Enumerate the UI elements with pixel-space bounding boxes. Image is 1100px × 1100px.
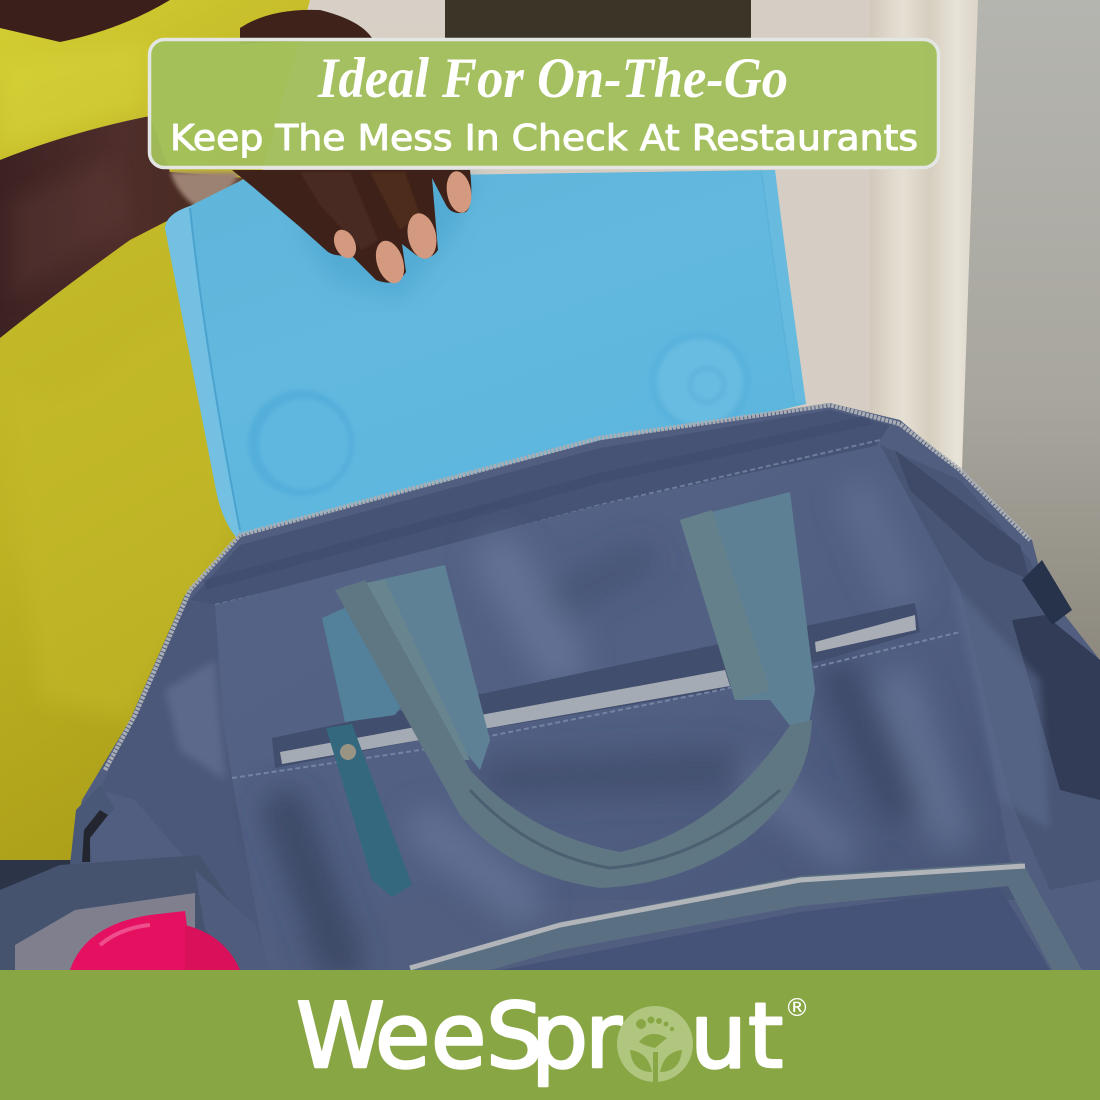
diamond stitched tab (322, 590, 420, 722)
footer band (0, 970, 1100, 1100)
side gusset left (100, 600, 265, 965)
hand and fingers holding mat (232, 169, 474, 287)
logo wordmark right: ut (690, 984, 783, 1089)
WeeSprout logo (296, 984, 810, 1089)
fingernails (330, 169, 474, 287)
banner subtitle: Keep The Mess In Check At Restaurants (170, 118, 918, 159)
bag body (70, 403, 1100, 970)
fabric carry handle (335, 492, 815, 888)
inner zipper pocket (232, 603, 960, 778)
yellow sweater (0, 0, 310, 910)
arm and wrist (0, 116, 245, 338)
neck and shoulder skin (0, 0, 170, 42)
upper fingers behind banner (240, 10, 372, 44)
pink cup (70, 911, 240, 970)
logo wordmark left: WeeSpr (296, 984, 622, 1089)
inner panel (215, 445, 1040, 940)
banner panel (150, 40, 938, 168)
main zipper along bag opening (105, 405, 1030, 770)
leather zipper pull (326, 724, 412, 897)
suction cup left (248, 390, 354, 496)
side gusset right (880, 445, 1100, 890)
suction cup right (649, 331, 751, 433)
bag rim lining (190, 410, 890, 605)
registered mark: ® (784, 993, 810, 1022)
fabric shadows and highlights (285, 500, 950, 960)
banner title: Ideal For On-The-Go (317, 47, 788, 110)
bag strap clip (70, 560, 1072, 865)
front pocket with zipper (410, 862, 1082, 970)
silicone mat (165, 170, 806, 537)
side pocket (0, 855, 270, 970)
logo badge: footprint and sprout (617, 1006, 693, 1082)
